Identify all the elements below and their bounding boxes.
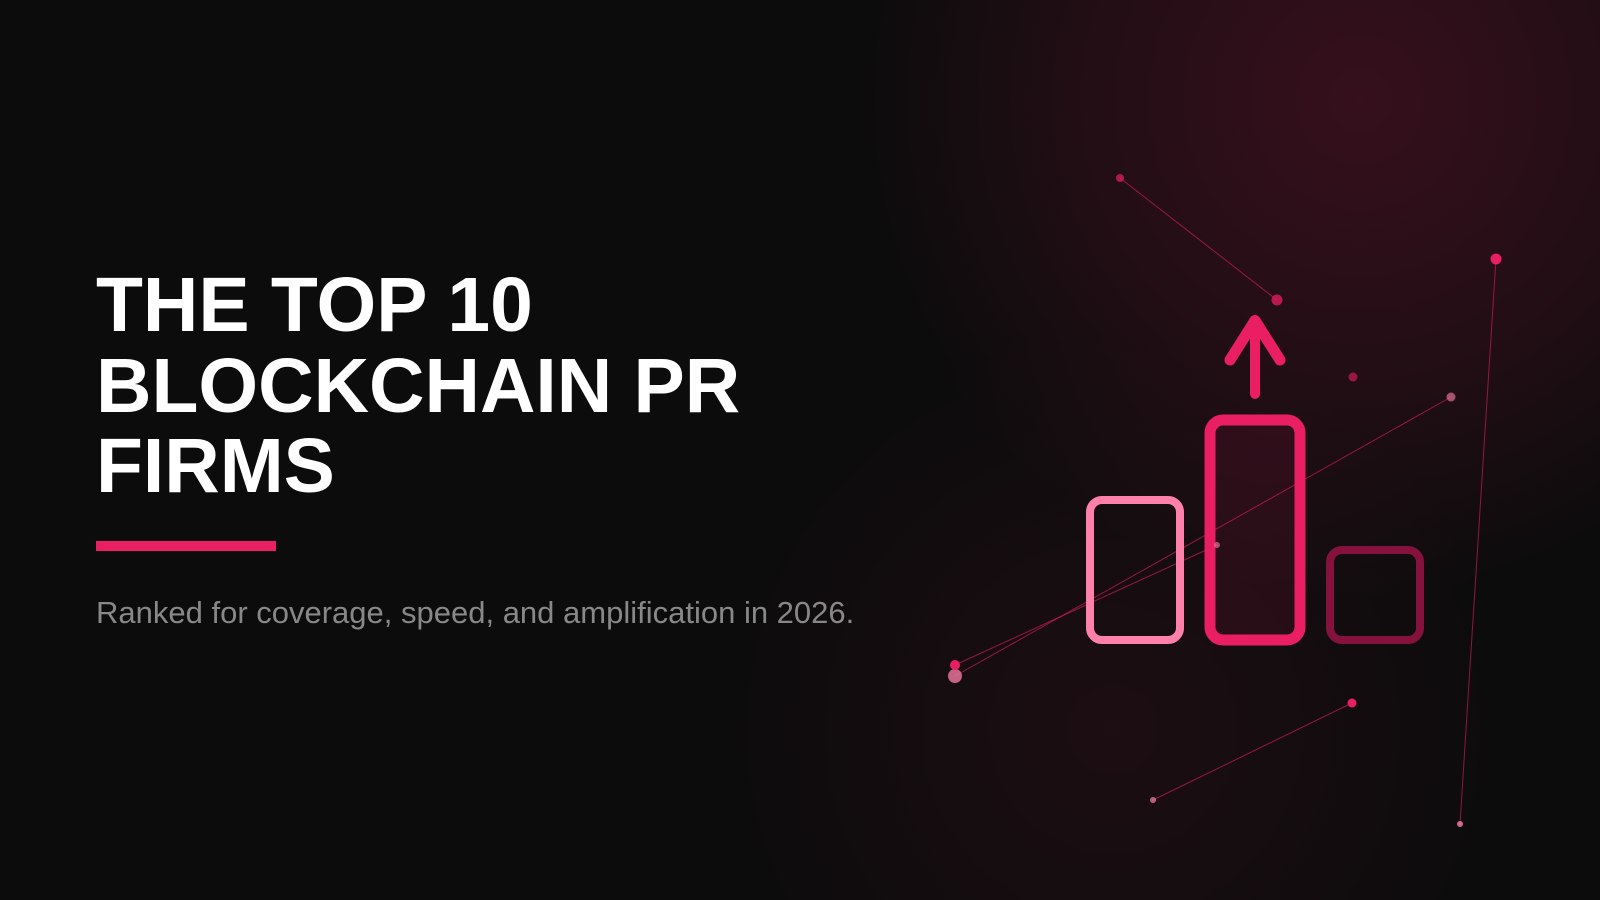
up arrow <box>1230 320 1280 394</box>
title: FIRMS <box>96 423 335 509</box>
right bar <box>1330 550 1420 640</box>
title: BLOCKCHAIN PR <box>96 343 740 429</box>
accent rule <box>96 541 276 551</box>
network lines <box>955 178 1496 824</box>
network dots <box>948 174 1502 827</box>
center bar <box>1210 420 1300 640</box>
title <box>96 262 740 509</box>
subtitle: Ranked for coverage, speed, and amplification in 2026. <box>96 595 854 630</box>
left bar <box>1090 500 1180 640</box>
title: THE TOP 10 <box>96 262 533 348</box>
bar chart icon <box>1090 420 1420 640</box>
